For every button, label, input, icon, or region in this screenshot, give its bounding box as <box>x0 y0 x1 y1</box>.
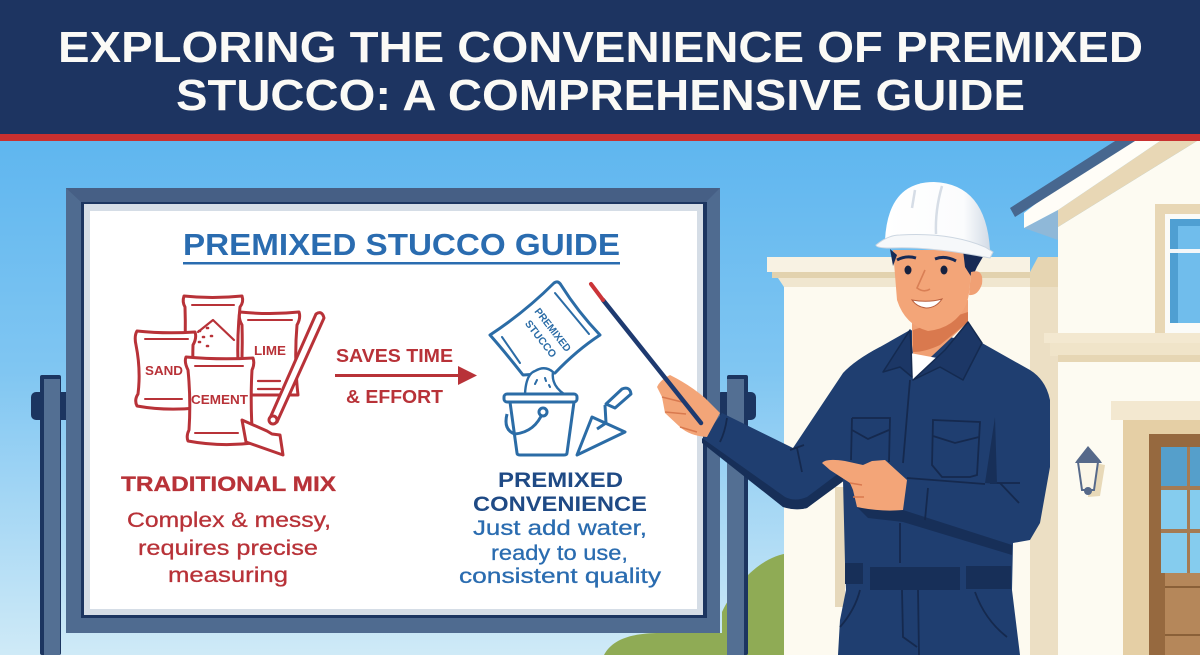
green bush <box>604 553 790 655</box>
icon: premixed stucco bag <box>490 282 600 394</box>
text: premixed convenience: CONVENIENCE <box>473 493 647 516</box>
neck <box>912 300 968 372</box>
text: traditional mix: requires precise <box>138 536 318 560</box>
text: traditional mix: Complex & messy, <box>127 508 331 532</box>
board posts <box>31 375 756 655</box>
title: STUCCO: A COMPREHENSIVE GUIDE <box>176 71 1025 120</box>
text: premixed convenience: ready to use, <box>491 541 628 565</box>
bag labels: SAND <box>145 363 183 378</box>
board heading: PREMIXED STUCCO GUIDE <box>183 227 620 262</box>
text: premixed convenience <box>459 469 661 588</box>
text: traditional mix: TRADITIONAL MIX <box>121 473 336 496</box>
bag label: PREMIXED <box>532 306 573 355</box>
board panel <box>66 188 720 633</box>
hand: pointing <box>822 460 907 511</box>
body shading <box>985 417 997 484</box>
ledge <box>1044 333 1200 362</box>
bag labels: LIME <box>254 343 286 358</box>
pointer stick <box>591 284 701 423</box>
eyes and brows <box>897 257 956 274</box>
arrow: saves time and effort <box>335 345 477 407</box>
title banner <box>0 0 1200 141</box>
collar <box>883 322 982 380</box>
text: traditional mix <box>121 473 336 587</box>
nose <box>917 270 930 291</box>
door <box>1111 401 1200 655</box>
text: premixed convenience: PREMIXED <box>498 469 623 492</box>
bag labels <box>145 343 286 407</box>
bag label: STUCCO <box>522 318 559 360</box>
hard hat <box>876 182 993 258</box>
window <box>1155 204 1200 333</box>
clothing seams <box>720 380 1020 655</box>
pointing arm <box>702 347 880 509</box>
text: premixed convenience: Just add water, <box>473 516 647 540</box>
smile <box>912 299 942 308</box>
torso and legs <box>838 330 1050 655</box>
arrow: saves time and effort: & EFFORT <box>346 386 444 407</box>
sky background <box>0 140 1200 655</box>
bag labels: CEMENT <box>191 392 248 407</box>
icon: red shovel <box>242 313 324 455</box>
hand holding pointer <box>657 375 720 437</box>
text: premixed convenience: consistent quality <box>459 564 661 588</box>
title: EXPLORING THE CONVENIENCE OF PREMIXED <box>58 23 1143 72</box>
icon: traditional material bags <box>135 296 300 445</box>
face <box>893 250 970 331</box>
text: traditional mix: measuring <box>168 563 288 587</box>
arrow: saves time and effort: SAVES TIME <box>336 345 453 366</box>
belt <box>845 563 1011 590</box>
house <box>767 141 1200 655</box>
forearm shadow <box>857 507 1012 555</box>
icon: bucket <box>504 394 577 455</box>
sleeve shadow <box>702 438 845 509</box>
wall lantern <box>1075 446 1105 497</box>
icon: blue trowel <box>577 388 631 455</box>
presenter <box>591 182 1050 655</box>
title <box>58 23 1143 120</box>
